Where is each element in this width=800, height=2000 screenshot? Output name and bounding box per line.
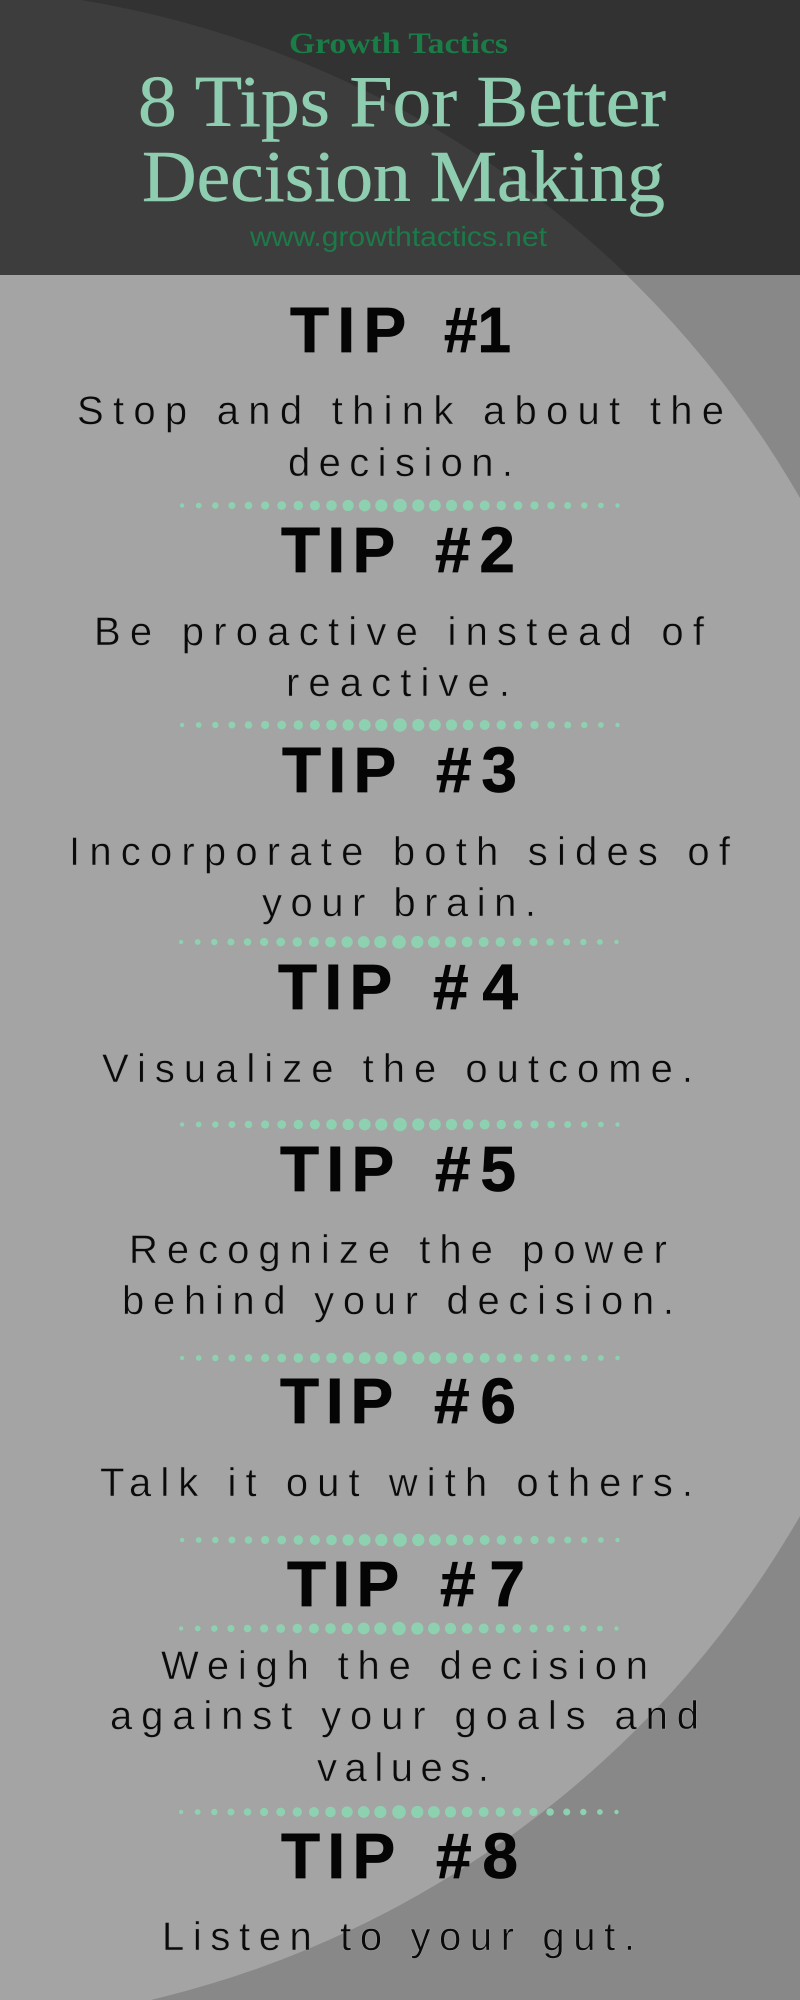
divider 5 bbox=[180, 1351, 620, 1365]
tip 6 text: Talk it out with others. bbox=[100, 1461, 693, 1505]
brand name: Growth Tactics bbox=[289, 27, 508, 60]
website url: www.growthtactics.net bbox=[249, 221, 547, 252]
tip 7 text bbox=[110, 1644, 699, 1790]
tip 8 heading: TIP bbox=[281, 1820, 394, 1892]
divider 8 bbox=[179, 1805, 619, 1819]
tip 8 heading: #8 bbox=[436, 1820, 518, 1892]
tip 4 text: Visualize the outcome. bbox=[102, 1047, 693, 1091]
header dark band bbox=[0, 0, 800, 275]
tip 1 heading: TIP bbox=[290, 294, 405, 366]
header circle overlay bbox=[0, 0, 627, 275]
title: Decision Making bbox=[142, 136, 665, 217]
tip 4 heading: #4 bbox=[433, 951, 518, 1023]
tip 3 text bbox=[69, 830, 731, 925]
tip 5 heading: #5 bbox=[435, 1133, 516, 1205]
tip 6 heading: #6 bbox=[434, 1365, 516, 1437]
tip 5 text: Recognize the power bbox=[129, 1228, 667, 1272]
divider 7 bbox=[179, 1622, 619, 1635]
tip 3 heading: TIP bbox=[282, 734, 395, 806]
tip 4 heading: TIP bbox=[278, 951, 391, 1023]
divider 1 bbox=[180, 499, 620, 512]
tip 2 text: Be proactive instead of bbox=[94, 610, 705, 654]
tip 2 text bbox=[94, 610, 705, 705]
panel: tip 8 bbox=[162, 1820, 635, 1959]
tip 1 text: Stop and think about the bbox=[77, 389, 724, 433]
tip 1 heading: #1 bbox=[444, 294, 511, 366]
tip 7 text: values. bbox=[317, 1746, 489, 1790]
tip 2 text: reactive. bbox=[286, 661, 510, 705]
tip 7 text: Weigh the decision bbox=[161, 1644, 648, 1688]
tip 3 heading: #3 bbox=[436, 734, 517, 806]
divider 6 bbox=[180, 1533, 620, 1547]
tip 5 text bbox=[122, 1228, 674, 1323]
panel: tip 1 bbox=[77, 294, 724, 485]
tip 3 text: your brain. bbox=[262, 881, 536, 925]
panel: tip 2 bbox=[94, 514, 705, 705]
tip 2 heading: #2 bbox=[435, 514, 515, 586]
tip 5 text: behind your decision. bbox=[122, 1279, 674, 1323]
tip 1 text: decision. bbox=[288, 441, 513, 485]
tip 6 heading: TIP bbox=[280, 1365, 392, 1437]
divider 4 bbox=[180, 1118, 620, 1131]
divider 3 bbox=[179, 935, 619, 949]
tip 7 text: against your goals and bbox=[110, 1694, 699, 1738]
tip 5 heading: TIP bbox=[280, 1133, 393, 1205]
title: 8 Tips For Better bbox=[138, 61, 666, 142]
header panel bbox=[0, 0, 800, 275]
tip 7 heading: #7 bbox=[440, 1548, 525, 1620]
tip 8 text: Listen to your gut. bbox=[162, 1915, 635, 1959]
divider 2 bbox=[180, 718, 620, 732]
panel: tip 5 bbox=[122, 1133, 674, 1323]
tip 1 text bbox=[77, 389, 724, 485]
title bbox=[138, 61, 666, 217]
tip 3 text: Incorporate both sides of bbox=[69, 830, 731, 874]
panel: tip 4 bbox=[102, 951, 693, 1091]
panel: tip 6 bbox=[100, 1365, 693, 1505]
panel: tip 7 bbox=[110, 1548, 699, 1790]
tip 2 heading: TIP bbox=[281, 514, 394, 586]
panel: tip 3 bbox=[69, 734, 731, 925]
tip 7 heading: TIP bbox=[287, 1548, 398, 1620]
